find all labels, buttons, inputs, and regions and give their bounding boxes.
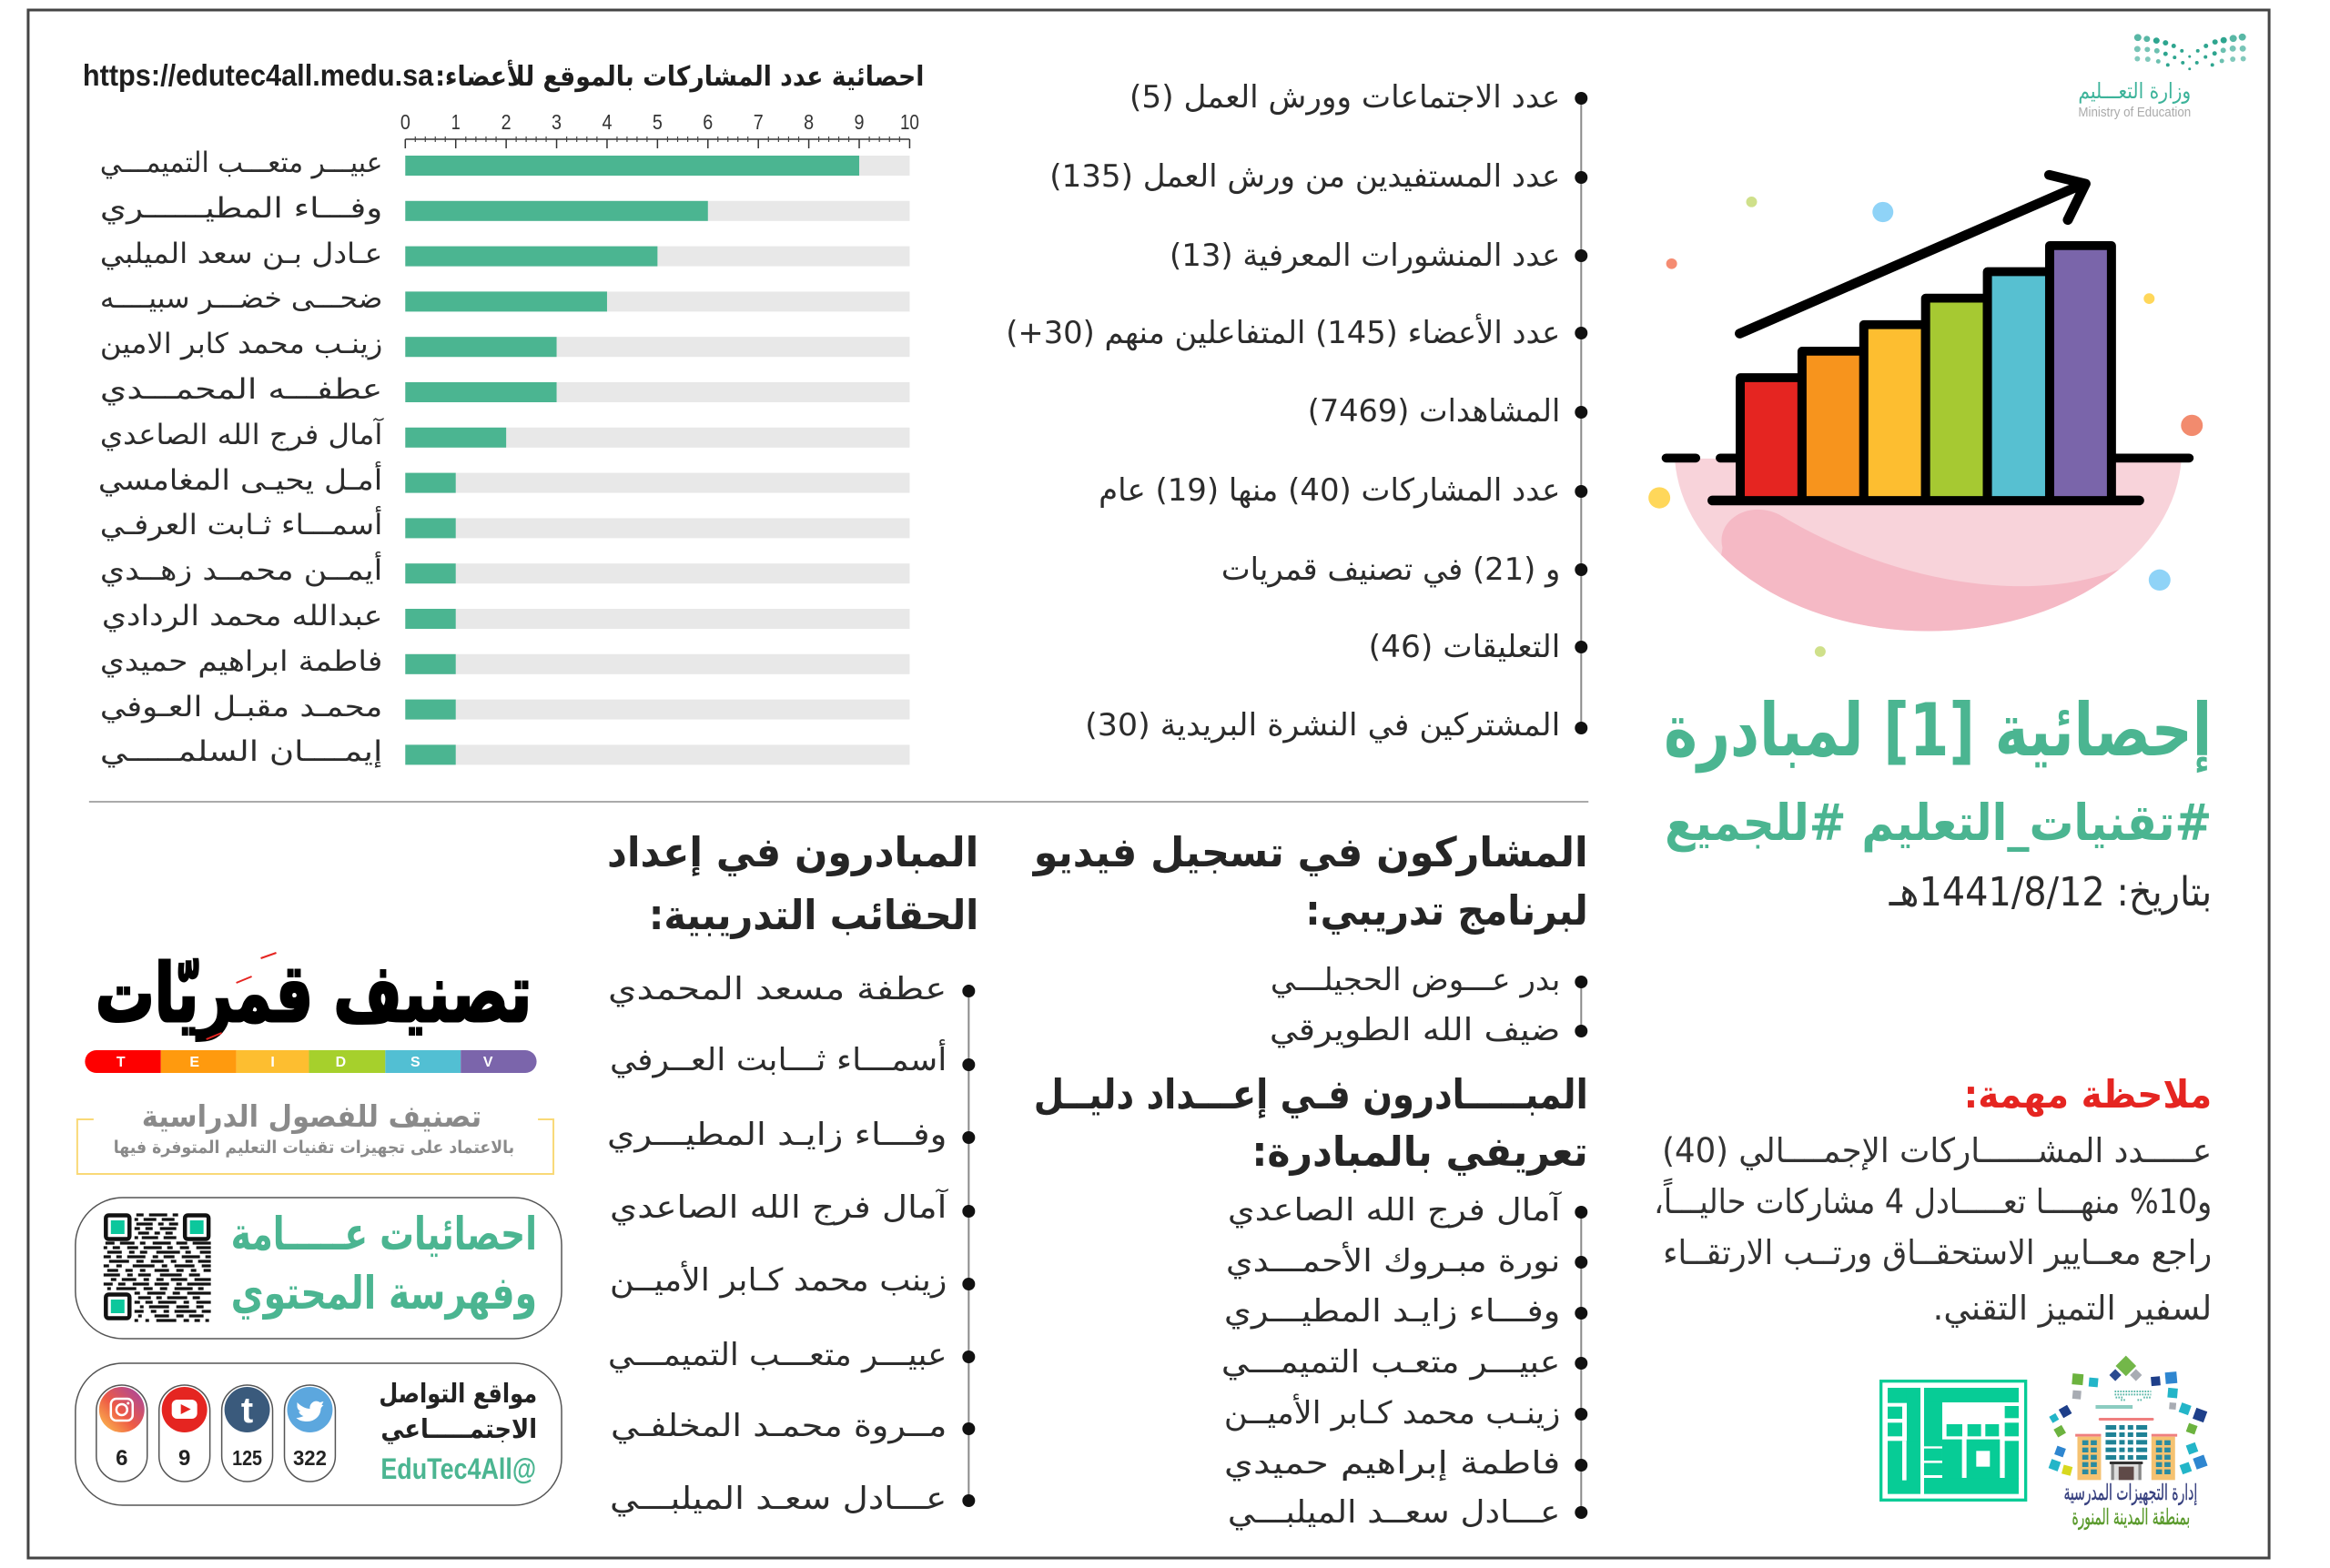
heading: training packages: الحقائب التدريبية: — [649, 891, 978, 939]
list: guide initiators: وفـــاء زايـد المطيـــري — [1224, 1293, 1560, 1330]
list: training packages: عطفة مسعد المحمدي — [608, 971, 947, 1007]
panel: initiative statistics list — [1006, 79, 1587, 744]
icon: instagram with count: 6 — [116, 1446, 127, 1471]
icon: youtube with count — [159, 1385, 210, 1482]
chart name labels: زينـب محمد كابر الامين — [100, 328, 382, 360]
panel: initiative statistics list: و (21) في تصنيف قمريات — [1221, 551, 1560, 588]
icon: tumblr with count — [222, 1385, 273, 1482]
social heading: الاجتمـــــاعي — [380, 1413, 537, 1444]
TEIDSV colour bar — [85, 1050, 537, 1073]
chart name labels: إيمــــان السلمـــــي — [100, 735, 382, 768]
logo: school equipment administration — [2049, 1356, 2208, 1530]
chart name labels: آمال فرج الله الصاعدي — [100, 417, 384, 451]
chart axis: 6 — [703, 110, 713, 134]
social heading: EduTec4All@ — [380, 1452, 536, 1485]
social heading: مواقع التواصل — [379, 1378, 537, 1409]
panel: initiative statistics list: عدد المشاركات (40) منها (19) عام — [1099, 472, 1560, 509]
chart axis: 10 — [900, 110, 919, 134]
date: بتاريخ: 1441/8/12هـ — [1889, 869, 2212, 916]
TEIDSV colour bar: E — [189, 1055, 199, 1070]
list: guide initiators — [1221, 1191, 1587, 1531]
panel: initiative statistics list: عدد الأعضاء (145) المتفاعلين منهم (30+) — [1006, 313, 1560, 351]
icon: instagram with count — [96, 1385, 147, 1482]
logo: school equipment administration: بمنطقة المدينة المنورة — [2072, 1504, 2190, 1530]
panel: initiative statistics list: عدد المنشورات المعرفية (13) — [1170, 238, 1560, 274]
classroom classification note: بالاعتماد على تجهيزات تقنيات التعليم المتوفرة فيها — [114, 1138, 514, 1158]
list: guide initiators: زينـب محمد كـابر الأميــن — [1224, 1393, 1560, 1431]
panel: social media — [76, 1363, 562, 1505]
chart name labels: فاطمة ابراهيم حميدي — [100, 645, 382, 678]
qamariyat wordmark: تصنيف قمريّات — [96, 946, 532, 1040]
note body: لسفير التميز التقني. — [1933, 1289, 2212, 1328]
note heading: ملاحظة مهمة: — [1964, 1072, 2212, 1118]
TEIDSV colour bar: S — [410, 1055, 420, 1070]
panel: initiative statistics list: المشتركين في النشرة البريدية (30) — [1085, 707, 1560, 744]
title: إحصائية [1] لمبادرة — [1664, 688, 2212, 774]
chart name labels: وفـــاء المطيــــــري — [100, 192, 382, 225]
general statistics text: احصائيات عـــــامة — [231, 1208, 537, 1260]
list: guide initiators: عـــادل سعــد الميلبـــي — [1228, 1494, 1560, 1531]
chart name labels: محمـد مقبـل العـوفي — [100, 691, 382, 723]
hashtag subtitle: #تقنيات_التعليم #للجميع — [1665, 794, 2212, 853]
heading: video participants: لبرنامج تدريبي: — [1305, 886, 1588, 935]
list: training packages: عبيـــر متعـــب التميمـــي — [608, 1337, 947, 1373]
heading: video participants — [1032, 828, 1588, 935]
chart tracks — [405, 156, 909, 764]
list: guide initiators: فاطمة إبراهيم حميدي — [1224, 1445, 1560, 1482]
chart name labels: أسمـــاء ثـابت العرفـي — [100, 506, 382, 541]
panel: initiative statistics list: التعليقات (46) — [1369, 629, 1560, 665]
heading: guide initiators: المبـــــادرون فـي إعـــداد دليــل — [1034, 1070, 1588, 1118]
general statistics text — [231, 1208, 537, 1320]
list: training packages: مــروة محمـد المخلفـي — [611, 1408, 947, 1444]
list: training packages: آمال فرج الله الصاعدي — [610, 1189, 948, 1226]
list: training packages: وفـــاء زايـد المطيـــري — [607, 1117, 947, 1153]
social heading — [379, 1378, 537, 1485]
chart name labels: عبيـــر متعـــب التميمـــي — [100, 147, 382, 179]
panel: general statistics with QR code — [76, 1198, 562, 1339]
TEIDSV colour bar: D — [336, 1055, 346, 1070]
panel: member contributions bar chart — [83, 58, 924, 768]
heading: guide initiators: تعريفي بالمبادرة: — [1251, 1128, 1588, 1176]
chart axis: 4 — [602, 110, 613, 134]
chart name labels: أيمــن محمــد زهــدي — [100, 551, 382, 587]
icon: youtube with count: 9 — [178, 1446, 190, 1471]
note body — [1654, 1131, 2212, 1328]
important note — [1654, 1072, 2212, 1328]
TEIDSV colour bar: T — [116, 1055, 126, 1070]
general statistics text: وفهرسة المحتوي — [231, 1267, 537, 1320]
list: training packages — [607, 971, 975, 1517]
note body: عـــــدد المشــــــاركات الإجمــــالي (40) — [1662, 1131, 2212, 1170]
classroom classification note: تصنيف للفصول الدراسية — [142, 1098, 481, 1135]
logo: school equipment administration: إدارة التجهيزات المدرسية — [2063, 1480, 2197, 1506]
ministry of education logo: وزارة التعـــليم — [2078, 78, 2191, 104]
icon: tumblr with count: 125 — [232, 1446, 262, 1470]
chart name labels: عـادل بـن سعد الميلبي — [100, 238, 382, 270]
chart title — [83, 58, 924, 93]
heading: guide initiators — [1034, 1070, 1588, 1176]
chart axis: 7 — [754, 110, 764, 134]
chart name labels: عطفـــه المحمـــدي — [100, 373, 382, 406]
heading: training packages — [607, 828, 978, 939]
TEIDSV colour bar: V — [483, 1055, 493, 1070]
heading: training packages: المبادرون في إعداد — [607, 828, 978, 876]
panel: training packages initiators — [607, 828, 978, 1517]
chart axis: 5 — [653, 110, 663, 134]
ministry of education logo: Ministry of Education — [2078, 105, 2191, 120]
note body: راجع معــايير الاستحقــاق ورتــب الارتقــاء — [1663, 1233, 2212, 1272]
chart axis: 3 — [552, 110, 562, 134]
chart axis: 9 — [855, 110, 865, 134]
chart axis: 8 — [804, 110, 814, 134]
qr code — [104, 1215, 211, 1320]
logo: green square kufic — [1879, 1380, 2027, 1502]
chart title: احصائية عدد المشاركات بالموقع للأعضاء: — [435, 59, 924, 93]
chart name labels: عبدالله محمد الردادي — [102, 600, 382, 632]
chart bars — [405, 156, 859, 764]
list: guide initiators: نورة مبـروك الأحمـــدي — [1226, 1241, 1560, 1280]
ministry of education logo — [2078, 34, 2246, 120]
list: training packages: زينب محمد كـابر الأميــن — [610, 1260, 947, 1299]
panel: initiative statistics list: عدد الاجتماعات وورش العمل (5) — [1130, 79, 1560, 116]
chart axis: 0 — [400, 110, 410, 134]
list: training packages: عـــادل سعـد الميلبـــي — [610, 1481, 947, 1517]
icon: tumblr with count: t — [241, 1391, 253, 1431]
heading: video participants: المشاركون في تسجيل فيديو — [1032, 828, 1588, 876]
list: video participants — [1270, 962, 1587, 1048]
chart axis — [400, 110, 919, 148]
panel: initiative statistics list: عدد المستفيدين من ورش العمل (135) — [1049, 158, 1560, 195]
list: video participants: ضيف الله الطويرقي — [1270, 1012, 1560, 1048]
title block — [1664, 688, 2212, 916]
chart axis: 2 — [501, 110, 512, 134]
panel: qamariyat classification — [77, 946, 553, 1174]
list: video participants: بدر عـــوض الحجيلـــي — [1271, 962, 1560, 998]
list: guide initiators: آمال فرج الله الصاعدي — [1228, 1191, 1562, 1229]
panel: video participants and guide initiators — [1032, 828, 1588, 1531]
list: training packages: أسمـــاء ثـــابت العــرفي — [610, 1039, 947, 1078]
chart name labels — [98, 147, 384, 768]
note body: و10% منهــــا تعـــــادل 4 مشاركات حاليـــاً، — [1654, 1178, 2212, 1221]
illustration: rising bar chart on pink bowl — [1648, 175, 2203, 663]
TEIDSV colour bar: I — [270, 1055, 275, 1070]
chart name labels: أمـل يحيـى المغامسي — [98, 461, 382, 497]
panel: initiative statistics list: المشاهدات (7469) — [1308, 393, 1560, 430]
icon: twitter with count: 322 — [293, 1446, 327, 1470]
list: guide initiators: عبيـــر متعـب التميمـــي — [1221, 1344, 1560, 1381]
chart axis: 1 — [451, 110, 461, 134]
classroom classification note — [77, 1098, 553, 1174]
icon: twitter with count — [285, 1385, 335, 1482]
chart name labels: ضحـــى خضـــر سبيــــه — [100, 282, 382, 315]
chart title: https://edutec4all.medu.sa — [83, 58, 434, 92]
